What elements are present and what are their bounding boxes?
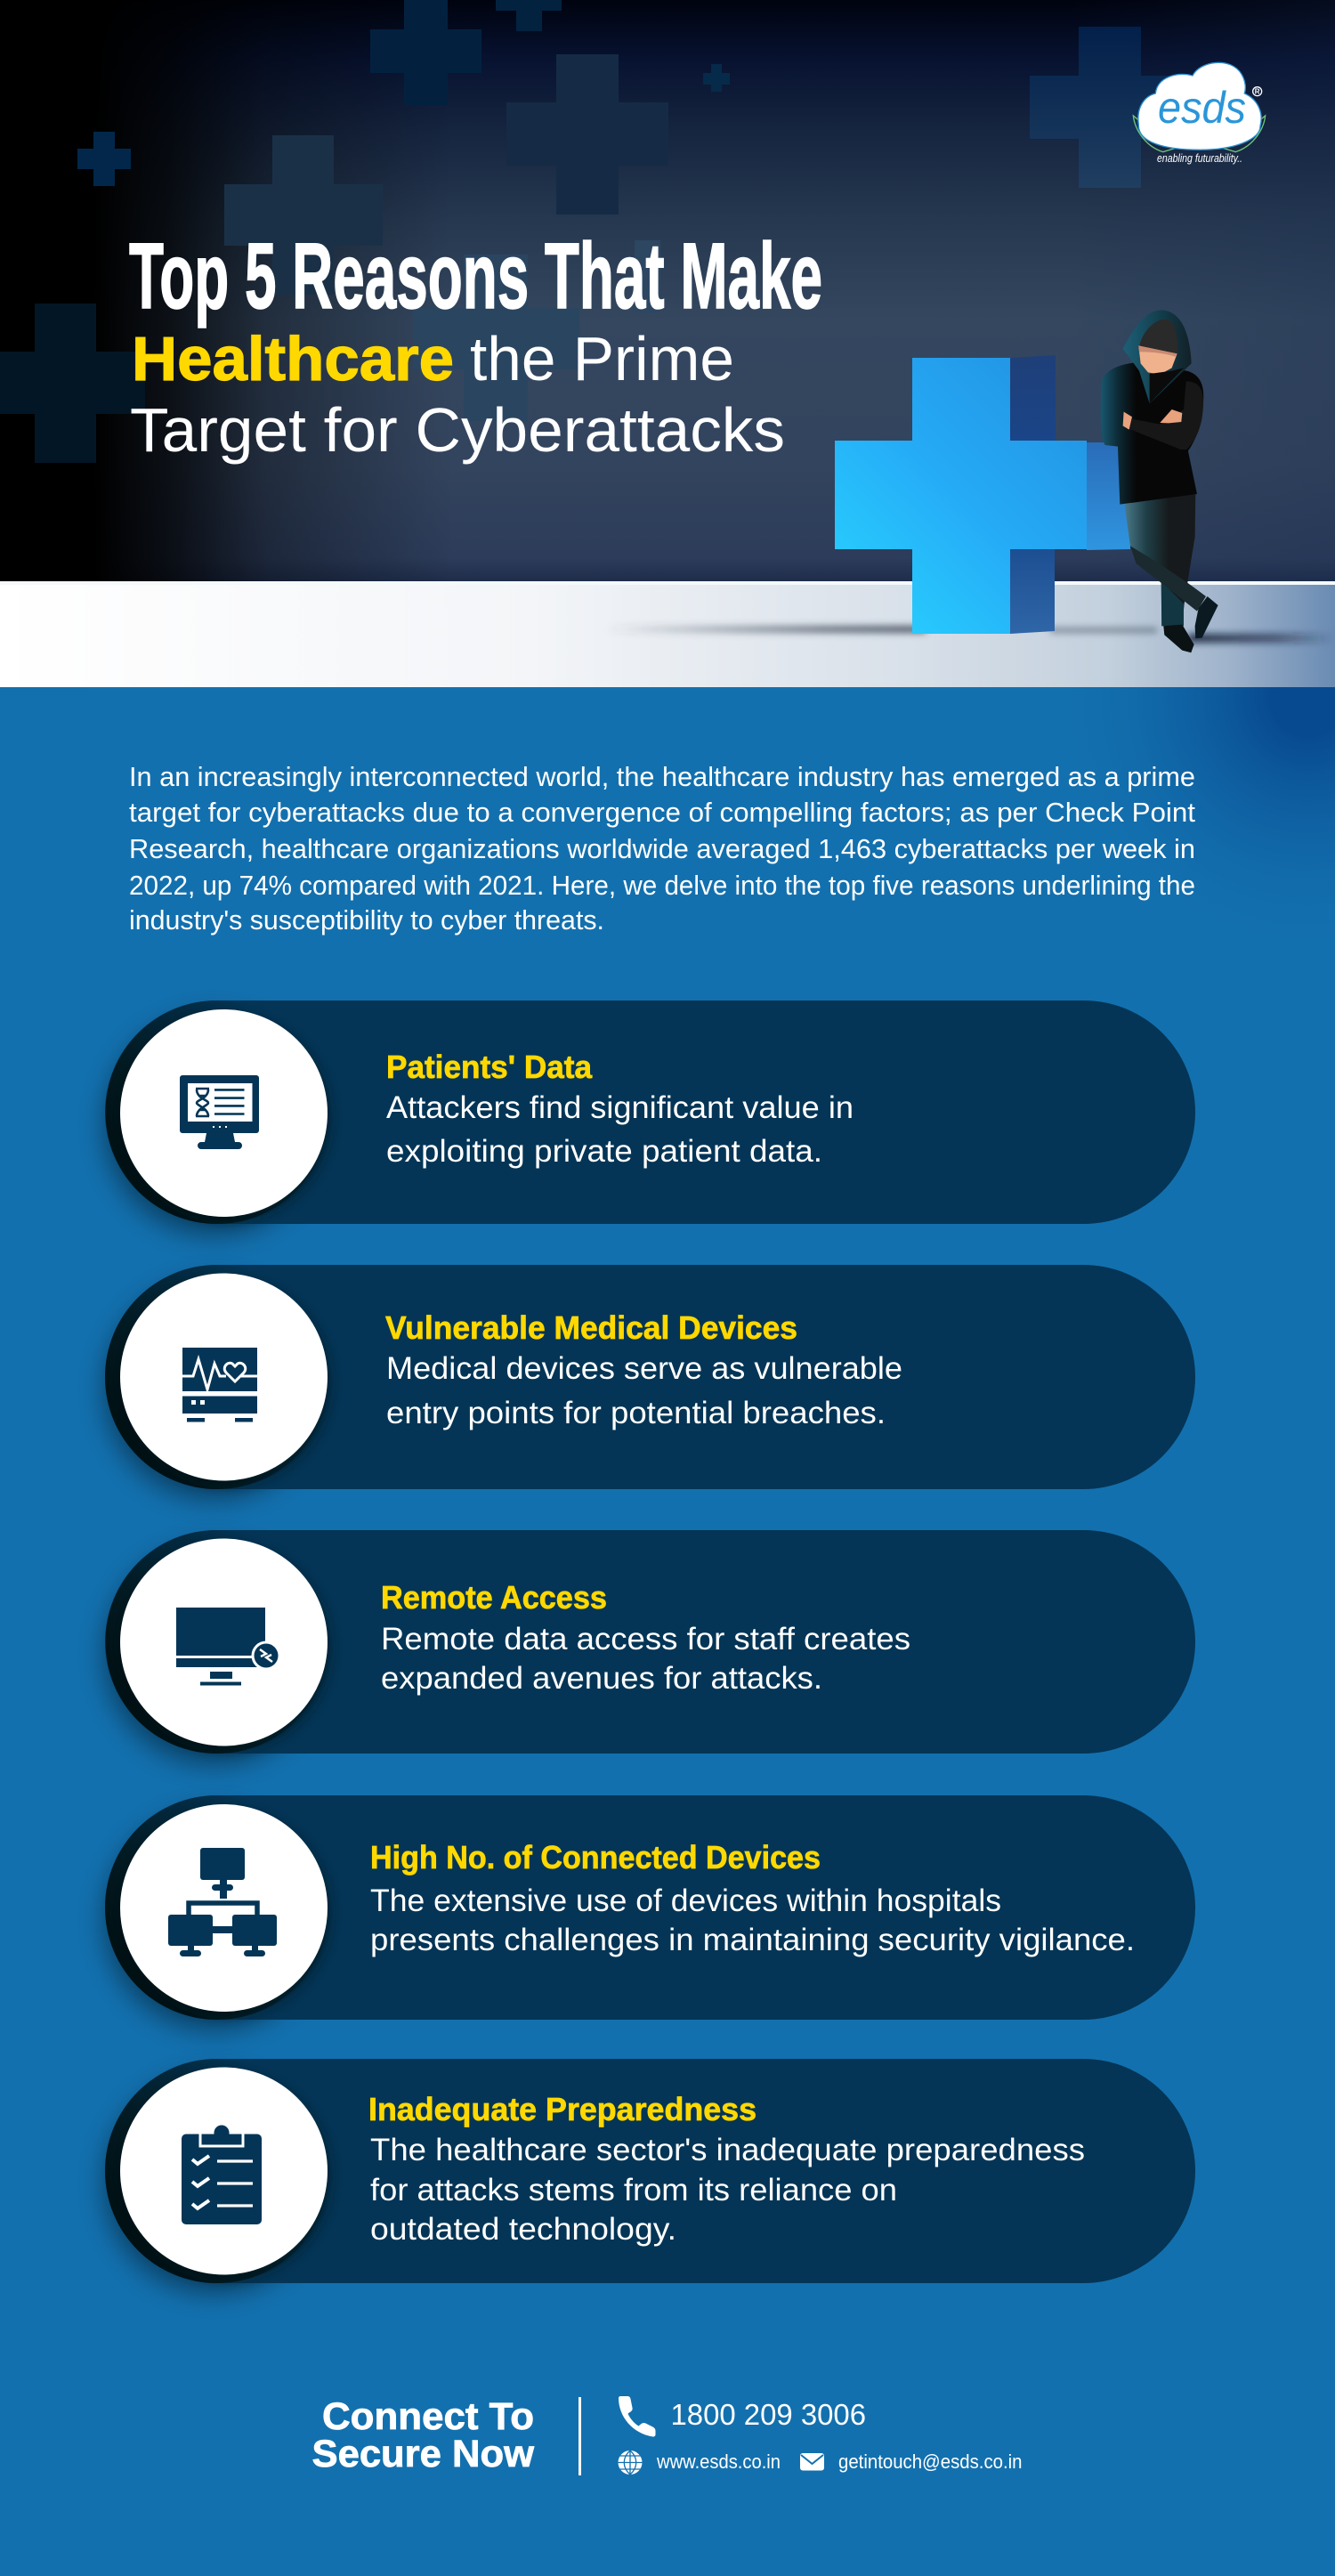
panel: connected devices xyxy=(103,1795,1195,2030)
icon: heart monitor xyxy=(182,1348,257,1422)
description: remote access: expanded avenues for attacks. xyxy=(381,1661,822,1696)
description: inadequate preparedness: The healthcare sector's inadequate preparedness xyxy=(370,2133,1085,2167)
main blue section background xyxy=(0,687,1335,2576)
description: connected devices xyxy=(370,1883,1135,1957)
intro paragraph: Research, healthcare organizations worldwide averaged 1,463 cyberattacks per week in xyxy=(129,833,1195,864)
intro paragraph: 2022, up 74% compared with 2021. Here, we delve into the top five reasons underlining the xyxy=(129,870,1195,901)
phone number: 1800 209 3006 xyxy=(671,2398,866,2431)
icon: clipboard checklist xyxy=(182,2124,262,2224)
background medical crosses xyxy=(0,0,1194,463)
footer call to action xyxy=(312,2395,535,2475)
footer call to action: Secure Now xyxy=(312,2433,535,2475)
intro paragraph: target for cyberattacks due to a convergence of compelling factors; as per Check Point xyxy=(129,797,1195,828)
icon: 3D blue medical cross xyxy=(835,355,1130,634)
logo: esds cloud xyxy=(1133,62,1266,165)
heading: remote access: Remote Access xyxy=(381,1579,607,1616)
panel: vulnerable medical devices xyxy=(103,1265,1195,1500)
footer divider xyxy=(578,2397,581,2475)
header background xyxy=(0,0,1335,581)
illustration: hooded hacker xyxy=(1101,310,1218,652)
description: vulnerable medical devices: Medical devices serve as vulnerable xyxy=(386,1351,902,1386)
description: patients' data: Attackers find significant value in xyxy=(386,1090,854,1125)
description: remote access: Remote data access for staff creates xyxy=(381,1622,910,1657)
description: inadequate preparedness: for attacks stems from its reliance on xyxy=(370,2173,897,2207)
intro paragraph: In an increasingly interconnected world, the healthcare industry has emerged as a prime xyxy=(129,761,1195,792)
description: vulnerable medical devices xyxy=(386,1351,902,1430)
title: Top 5 Reasons That Make xyxy=(129,224,822,328)
title: the Prime xyxy=(470,324,734,393)
title xyxy=(129,224,822,465)
panel: patients' data xyxy=(103,1000,1195,1235)
title: Target for Cyberattacks xyxy=(130,395,785,465)
description: patients' data xyxy=(386,1090,854,1169)
description: inadequate preparedness xyxy=(370,2133,1085,2247)
heading: patients' data: Patients' Data xyxy=(386,1049,593,1085)
intro paragraph xyxy=(129,761,1195,936)
footer call to action: Connect To xyxy=(322,2395,534,2438)
description: vulnerable medical devices: entry points for potential breaches. xyxy=(386,1396,886,1430)
email: getintouch@esds.co.in xyxy=(838,2450,1022,2473)
description: inadequate preparedness: outdated technology. xyxy=(370,2212,676,2247)
icon: phone xyxy=(619,2396,655,2437)
floor shadows xyxy=(605,626,1335,643)
description: connected devices: presents challenges in maintaining security vigilance. xyxy=(370,1923,1135,1957)
icon: network of computers xyxy=(168,1848,277,1956)
icon: mail xyxy=(800,2453,824,2471)
title: Healthcare xyxy=(132,324,454,393)
logo: esds cloud: esds xyxy=(1158,83,1246,133)
logo: esds cloud: enabling futurability.. xyxy=(1157,152,1242,165)
description: remote access xyxy=(381,1622,910,1696)
icon: monitor with DNA xyxy=(180,1075,259,1149)
description: connected devices: The extensive use of devices within hospitals xyxy=(370,1883,1001,1918)
heading: inadequate preparedness: Inadequate Preparedness xyxy=(368,2091,756,2127)
heading: connected devices: High No. of Connected Devices xyxy=(370,1839,821,1875)
icon: globe xyxy=(618,2450,643,2475)
website: www.esds.co.in xyxy=(656,2450,781,2473)
floor xyxy=(0,581,1335,687)
heading: vulnerable medical devices: Vulnerable Medical Devices xyxy=(385,1309,797,1346)
description: patients' data: exploiting private patient data. xyxy=(386,1134,822,1169)
logo: esds cloud: R xyxy=(1255,88,1260,96)
panel: inadequate preparedness xyxy=(103,2059,1195,2294)
panel: remote access xyxy=(103,1530,1195,1765)
icon: remote monitor xyxy=(176,1608,281,1686)
intro paragraph: industry's susceptibility to cyber threats. xyxy=(129,904,604,936)
